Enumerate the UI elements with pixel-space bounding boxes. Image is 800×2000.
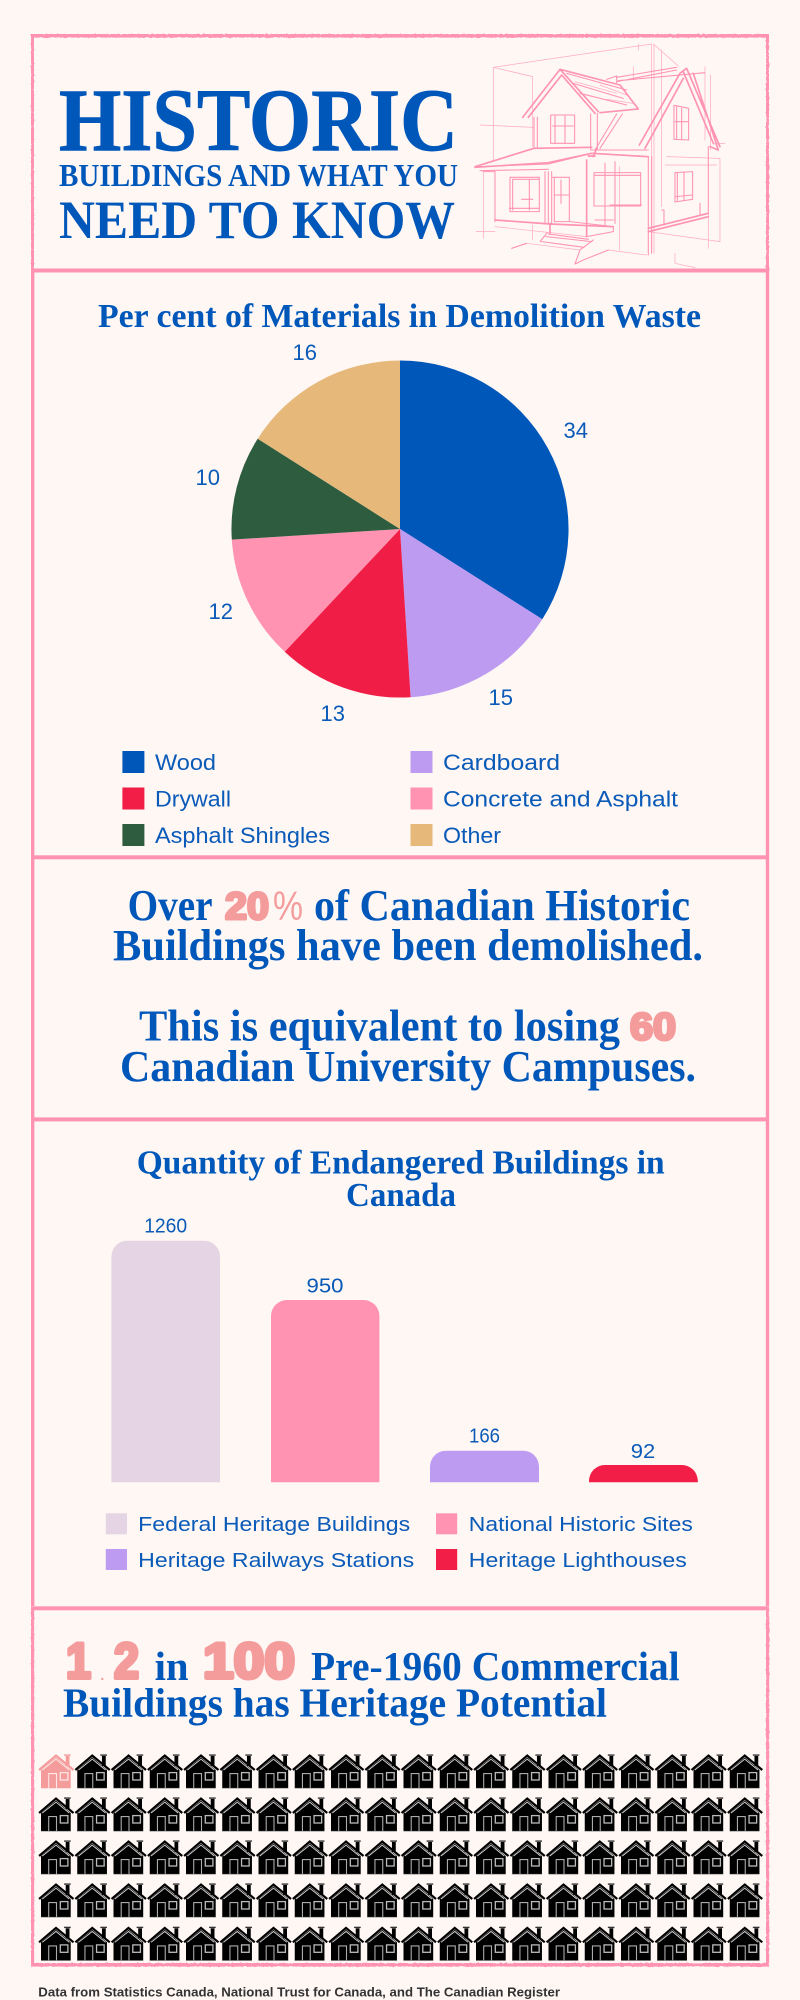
pie legend: Wood: [155, 750, 216, 775]
callout: demolished statistic: Over: [128, 881, 213, 930]
pie legend: [122, 750, 678, 848]
heading: heritage potential statistic: .: [100, 1663, 105, 1685]
callout: demolished statistic: This is equivalent to losing: [139, 1002, 620, 1051]
bar chart legend: Heritage Railways Stations: [138, 1550, 414, 1572]
callout: demolished statistic: %: [273, 883, 303, 929]
pie legend: Asphalt Shingles: [155, 823, 330, 848]
pie value labels: [195, 340, 588, 726]
pie value labels: 12: [208, 599, 233, 624]
heading: heritage potential statistic: [63, 1633, 680, 1726]
pie legend: Drywall: [155, 786, 231, 812]
callout: demolished statistic: Buildings have been demolished.: [113, 921, 703, 970]
heading: bar chart: Quantity of Endangered Buildings in: [137, 1144, 665, 1181]
heading: heritage potential statistic: Pre-1960 Commercial: [311, 1643, 680, 1689]
callout: demolished statistic: 60: [630, 1007, 676, 1049]
bar chart legend: National Historic Sites: [469, 1514, 693, 1536]
pie value labels: 10: [195, 465, 220, 490]
heading: heritage potential statistic: in: [155, 1643, 189, 1689]
bar chart legend: [106, 1513, 693, 1572]
pie value labels: 13: [320, 701, 345, 726]
callout: demolished statistic: 20: [225, 886, 269, 928]
title: BUILDINGS AND WHAT YOU: [59, 157, 458, 193]
title: HISTORIC: [59, 72, 458, 170]
pie legend: Other: [443, 823, 501, 848]
callout: demolished statistic: [113, 881, 703, 1091]
icon: house blueprint sketch: [475, 44, 725, 268]
title: NEED TO KNOW: [59, 190, 455, 250]
pie value labels: 34: [563, 418, 588, 443]
bar chart: 950: [306, 1275, 344, 1298]
bar chart: [111, 1215, 698, 1482]
pie legend: Concrete and Asphalt: [443, 786, 678, 812]
icon: highlighted pink house: [39, 1754, 74, 1788]
pie legend: Cardboard: [443, 750, 560, 775]
callout: demolished statistic: of Canadian Historic: [314, 881, 690, 930]
heading: bar chart: Canada: [346, 1177, 456, 1214]
source note: Data from Statistics Canada, National Trust for Canada, and The Canadian Register: [38, 1986, 560, 2000]
pie value labels: 16: [292, 340, 317, 365]
heading: heritage potential statistic: 2: [114, 1633, 139, 1689]
title: [59, 72, 458, 250]
pie value labels: 15: [488, 685, 513, 710]
heading: bar chart: [137, 1144, 665, 1214]
heading: pie chart: Per cent of Materials in Demolition Waste: [98, 298, 701, 335]
callout: demolished statistic: Canadian University Campuses.: [120, 1042, 696, 1091]
heading: heritage potential statistic: 100: [203, 1633, 295, 1689]
bar chart legend: Heritage Lighthouses: [469, 1550, 687, 1572]
heading: heritage potential statistic: 1: [66, 1633, 91, 1689]
pie chart: [231, 360, 569, 698]
bar chart: 166: [469, 1425, 500, 1448]
bar chart legend: Federal Heritage Buildings: [138, 1514, 410, 1536]
bar chart: 1260: [144, 1215, 187, 1238]
pictogram: 100 houses, 1.2 highlighted: [39, 1754, 762, 1961]
heading: heritage potential statistic: Buildings has Heritage Potential: [63, 1680, 607, 1726]
bar chart: 92: [631, 1440, 655, 1463]
